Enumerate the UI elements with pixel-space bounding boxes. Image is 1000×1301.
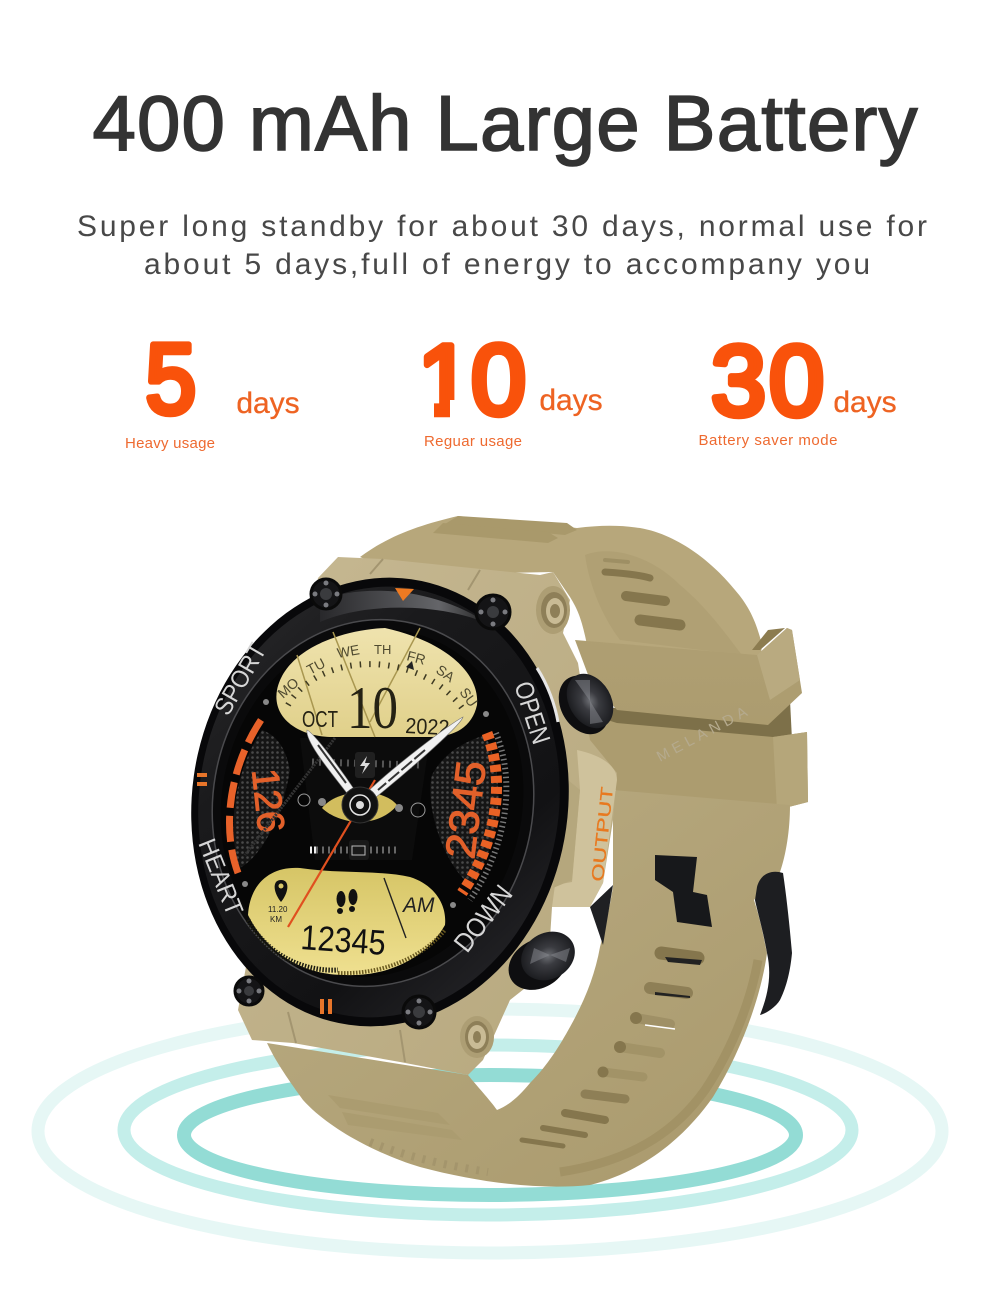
weekday labels: TU [304, 655, 328, 678]
lug seams [288, 559, 480, 1062]
gap behind keeper loops [610, 700, 792, 740]
stat: 5 days heavy usage: days [236, 387, 300, 420]
am label: AM [401, 894, 435, 917]
right mesh [430, 735, 499, 885]
bezel labels: SPORT [209, 638, 272, 720]
weekday labels [274, 641, 481, 710]
subtitle text block: Super long standby for about 30 days, normal use for [77, 210, 927, 243]
bolt badge [355, 752, 375, 778]
stat: 10 days regular usage [412, 324, 603, 450]
bezel markers [395, 588, 414, 601]
stat: 30 days battery saver: Battery saver mode [698, 432, 838, 449]
output label: OUTPUT [588, 786, 617, 882]
heart value: 126 [243, 767, 292, 835]
watch dial: KM [270, 915, 282, 924]
bezel labels: DOWN [448, 879, 519, 958]
center dark panel [300, 738, 430, 860]
watch dial: 2022 [405, 713, 450, 740]
bezel top highlight [320, 591, 490, 625]
strap bottom texture [370, 1142, 488, 1172]
bezel labels: HEART [192, 835, 248, 919]
center hub [342, 787, 378, 823]
lower data panel [248, 868, 445, 975]
side bracket [590, 885, 613, 945]
slot inner dark pieces [655, 957, 702, 998]
upper keeper loop [575, 628, 802, 725]
crown buttons [499, 665, 623, 1000]
stat: 5 days heavy usage: 5 [146, 325, 196, 435]
watch bezel [163, 553, 597, 1051]
lug screw top [536, 586, 570, 634]
side icons [298, 794, 425, 817]
bezel screws [235, 579, 510, 1028]
weekday labels: SA [433, 661, 458, 686]
buckle tab [655, 855, 712, 927]
bezel right gloss [537, 668, 558, 722]
watch dial: 10 [347, 675, 398, 741]
bezel labels: OPEN [508, 678, 557, 748]
steps value: 2345 [436, 758, 495, 861]
stat: 30 days battery saver [698, 325, 897, 449]
watch dial [186, 599, 558, 1007]
footsteps icon [336, 889, 358, 914]
black diagonal line [245, 738, 335, 855]
stat: 10 days regular usage: Reguar usage [424, 433, 522, 450]
watch strap [267, 516, 808, 1187]
left orange gauge [229, 720, 261, 873]
lug screw bottom [460, 1016, 494, 1058]
stat: 30 days battery saver: 30 [711, 325, 824, 436]
weekday labels: WE [336, 641, 361, 661]
upper strap inner shading [585, 551, 742, 655]
distance: 11.20 [268, 905, 288, 914]
output guard [552, 750, 617, 907]
lower keeper loop [575, 710, 808, 810]
right buckle [755, 872, 792, 1015]
upper strap [360, 516, 762, 662]
wireless charging rings [38, 1009, 942, 1253]
lower strap [267, 790, 790, 1187]
watermark: MELANDA [654, 704, 750, 766]
keeper loop interior [752, 628, 785, 650]
location pin [275, 880, 287, 902]
lower strap slots [522, 953, 698, 1146]
center yellow bar [322, 792, 397, 822]
stat: 10 days regular usage: days [539, 384, 603, 417]
weekday labels: TH [374, 642, 391, 657]
weekday labels: SU [457, 685, 481, 710]
side dots [242, 699, 489, 908]
date text: OCT [302, 706, 338, 732]
hour hand [307, 730, 356, 797]
strap dark outer edge [560, 960, 758, 1172]
stat: 5 days heavy usage: Heavy usage [125, 435, 215, 452]
weekday labels: FR [405, 647, 427, 668]
stat: 5 days heavy usage [125, 325, 300, 452]
second hand [288, 780, 375, 927]
small indicator ticks [310, 762, 420, 850]
left mesh [233, 730, 290, 868]
upper date panel [276, 628, 477, 737]
upper strap ridges [433, 516, 577, 543]
subtitle text block [77, 210, 927, 281]
lower strap ridges [328, 1095, 462, 1140]
stat: 30 days battery saver: days [833, 386, 897, 419]
strap slot highlights [645, 1025, 675, 1029]
steps text: 12345 [299, 918, 387, 963]
upper strap slots [605, 560, 680, 625]
weekday labels: MO [274, 674, 302, 701]
weekday tick arc [288, 664, 462, 708]
minute hand [364, 717, 463, 802]
watch case lugs [238, 557, 617, 1075]
bezel labels [192, 638, 557, 958]
subtitle text block: about 5 days,full of energy to accompany you [144, 248, 870, 281]
right orange gauge [462, 733, 497, 893]
slot dark dots [598, 1012, 642, 1078]
stat: 10 days regular usage: 10 [418, 324, 526, 435]
title: 400 mAh Large Battery [92, 79, 918, 167]
battery badge [349, 840, 369, 860]
